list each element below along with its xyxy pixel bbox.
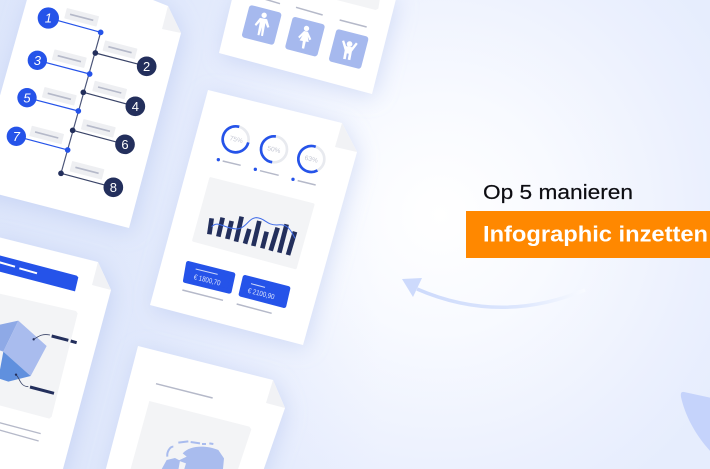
timeline graphic	[7, 7, 156, 197]
map shape	[157, 447, 224, 469]
subtitle: Op 5 manieren	[483, 181, 633, 204]
title banner: Infographic inzetten	[483, 222, 708, 246]
icon: woman	[285, 16, 325, 57]
icon: child	[328, 29, 369, 69]
arrow	[402, 278, 585, 307]
timeline graphic: 3	[34, 53, 42, 68]
page: dashboard: 63%	[304, 155, 319, 165]
timeline graphic: 7	[13, 129, 21, 144]
page: dashboard: 50%	[266, 145, 281, 155]
corner shape	[681, 392, 710, 453]
timeline graphic: 1	[45, 11, 52, 26]
cube chart	[0, 321, 18, 352]
page: timeline	[0, 0, 181, 228]
timeline graphic: 6	[121, 137, 129, 152]
page: dashboard: 75%	[229, 135, 244, 145]
page: people icons	[219, 0, 397, 94]
page: dashboard: € 2100,90	[247, 286, 276, 301]
header bar	[0, 255, 78, 291]
page: dashboard: € 1800,70	[193, 272, 222, 288]
timeline graphic: 8	[110, 180, 117, 195]
timeline graphic: 2	[143, 59, 150, 74]
value cards	[185, 263, 233, 291]
title banner	[466, 211, 710, 258]
bar chart panel	[194, 179, 313, 268]
ring charts	[220, 124, 329, 177]
page: dashboard	[150, 90, 357, 345]
page: cube diagram	[0, 235, 111, 469]
timeline graphic: 4	[132, 99, 139, 114]
page: map	[103, 346, 285, 469]
icon: man	[241, 5, 282, 45]
timeline graphic: 5	[23, 90, 31, 105]
